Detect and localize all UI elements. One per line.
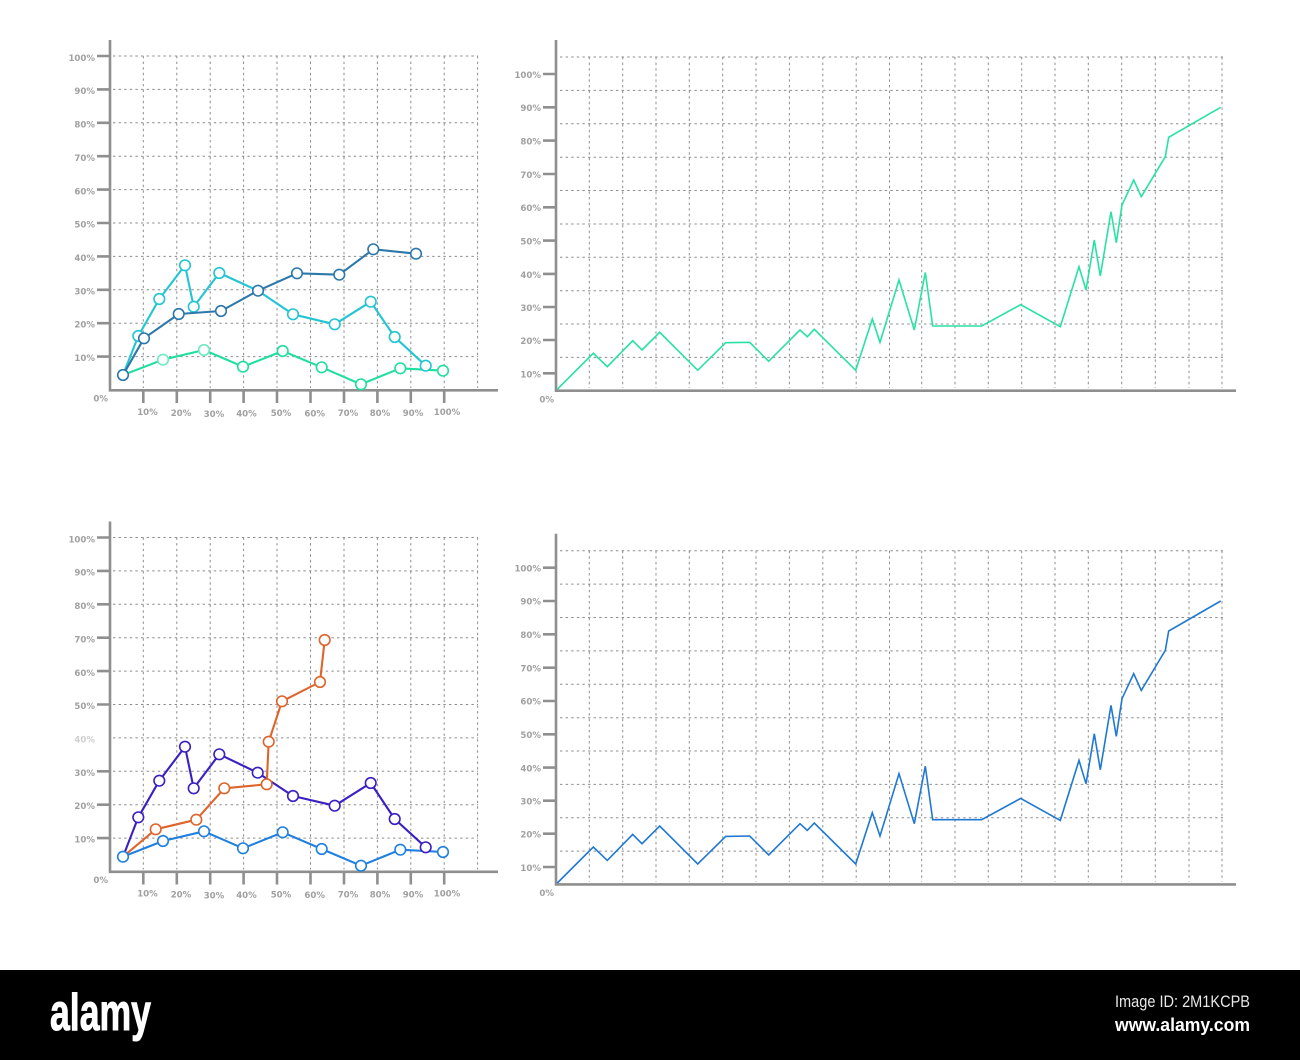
y axis labels <box>68 54 108 404</box>
x axis labels <box>137 890 461 902</box>
axes and ticks <box>543 534 1236 884</box>
y axis labels: 10% <box>520 864 541 874</box>
y axis labels: 70% <box>74 154 95 164</box>
y axis labels: 30% <box>520 304 541 314</box>
x axis labels: 30% <box>204 410 225 420</box>
y axis labels: 70% <box>520 665 541 675</box>
x axis labels: 100% <box>434 890 461 900</box>
x axis labels: 50% <box>271 890 292 900</box>
series: blue trend line <box>557 601 1221 883</box>
x axis labels: 10% <box>137 408 158 418</box>
y axis labels: 60% <box>520 698 541 708</box>
series: orange line, bottom-left chart <box>118 635 330 862</box>
y axis labels: 0% <box>93 876 108 886</box>
y axis labels <box>514 71 554 406</box>
panel: bottom-right blue line chart <box>514 534 1236 899</box>
x axis labels: 40% <box>236 410 257 420</box>
x axis labels: 50% <box>271 409 292 419</box>
y axis labels: 100% <box>514 565 541 575</box>
x axis labels: 20% <box>171 890 192 900</box>
y axis labels: 20% <box>520 831 541 841</box>
y axis labels <box>68 536 108 886</box>
y axis labels: 30% <box>74 769 95 779</box>
watermark logo: alamy <box>50 984 151 1042</box>
x axis labels: 80% <box>370 409 391 419</box>
panel: top-left multi-line chart <box>68 40 498 420</box>
series: blue line, bottom-left chart <box>123 826 448 871</box>
y axis labels: 40% <box>520 271 541 281</box>
x axis labels: 10% <box>137 890 158 900</box>
x axis labels: 60% <box>304 891 325 901</box>
y axis labels: 0% <box>93 394 108 404</box>
x axis labels: 90% <box>403 890 424 900</box>
y axis labels: 40% <box>74 254 95 264</box>
x axis labels: 30% <box>204 892 225 902</box>
watermark band <box>0 970 1300 1060</box>
x axis labels: 90% <box>403 409 424 419</box>
y axis labels: 40% <box>520 765 541 775</box>
y axis labels: 30% <box>74 288 95 298</box>
y axis labels: 60% <box>520 204 541 214</box>
website: www.alamy.com <box>1114 1015 1250 1035</box>
y axis labels: 10% <box>74 354 95 364</box>
y axis labels: 50% <box>520 238 541 248</box>
axes and ticks <box>97 522 498 884</box>
y axis labels: 90% <box>74 568 95 578</box>
x axis labels: 80% <box>370 890 391 900</box>
x axis labels: 70% <box>338 409 359 419</box>
y axis labels: 0% <box>539 889 554 899</box>
y axis labels: 50% <box>74 702 95 712</box>
y axis labels: 60% <box>74 188 95 198</box>
x axis labels: 40% <box>236 891 257 901</box>
x axis labels <box>137 408 461 420</box>
y axis labels: 30% <box>520 798 541 808</box>
x axis labels: 70% <box>338 890 359 900</box>
y axis labels: 20% <box>74 320 95 330</box>
panel: bottom-left multi-line chart <box>68 522 498 902</box>
series: green line <box>123 345 448 390</box>
y axis labels: 80% <box>74 602 95 612</box>
y axis labels: 90% <box>74 87 95 97</box>
y axis labels: 100% <box>514 71 541 81</box>
series: green trend line <box>557 107 1221 389</box>
y axis labels: 70% <box>74 636 95 646</box>
y axis labels: 10% <box>74 836 95 846</box>
y axis labels: 50% <box>520 731 541 741</box>
y axis labels: 60% <box>74 669 95 679</box>
y axis labels <box>514 565 554 899</box>
axes and ticks <box>97 40 498 403</box>
y axis labels: 70% <box>520 171 541 181</box>
y axis labels: 90% <box>520 598 541 608</box>
y axis labels: 20% <box>74 802 95 812</box>
axes and ticks <box>543 40 1236 391</box>
y axis labels: 90% <box>520 104 541 114</box>
y axis labels: 80% <box>520 138 541 148</box>
x axis labels: 100% <box>434 408 461 418</box>
x axis labels: 60% <box>304 410 325 420</box>
panel: top-right green line chart <box>514 40 1236 406</box>
y axis labels: 80% <box>74 120 95 130</box>
y axis labels: 80% <box>520 631 541 641</box>
y axis labels: 100% <box>68 54 95 64</box>
y axis labels: 100% <box>68 536 95 546</box>
y axis labels: 10% <box>520 370 541 380</box>
y axis labels: 0% <box>539 396 554 406</box>
y axis labels: 20% <box>520 337 541 347</box>
series: purple line, bottom-left chart <box>123 741 431 857</box>
series: dark blue line <box>118 244 421 380</box>
image id: Image ID: 2M1KCPB <box>1115 992 1250 1011</box>
y axis labels: 40% <box>74 736 95 746</box>
series: teal line <box>123 260 431 375</box>
y axis labels: 50% <box>74 220 95 230</box>
x axis labels: 20% <box>171 409 192 419</box>
